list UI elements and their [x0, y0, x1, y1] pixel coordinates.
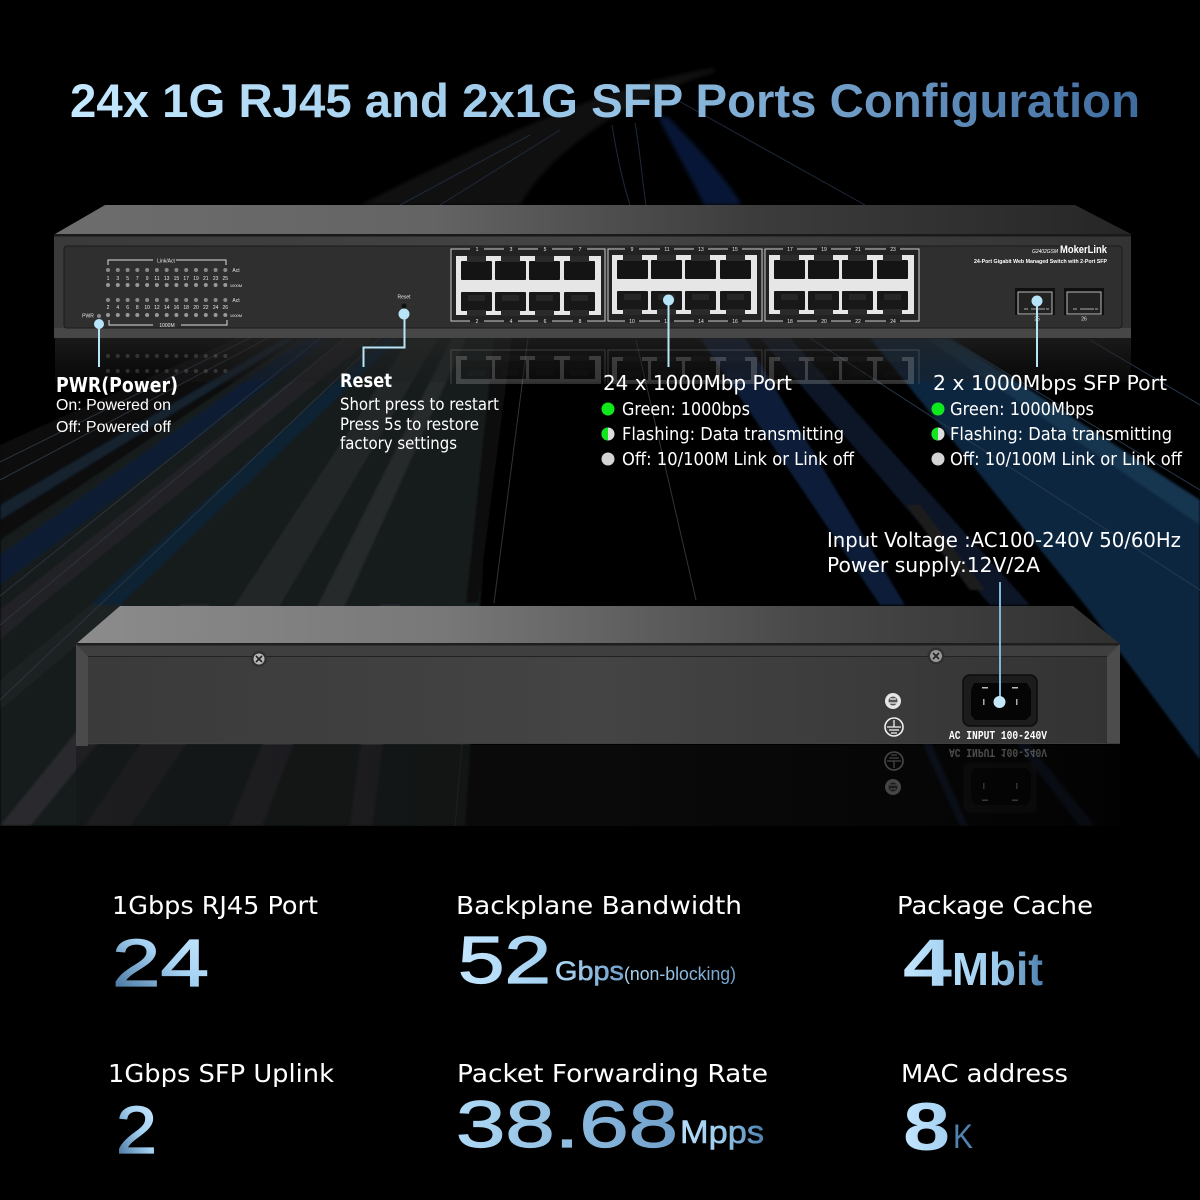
RJ45 port groups: 23	[890, 247, 896, 253]
spec: packet forwarding rate	[456, 1059, 768, 1161]
spec: backplane bandwidth	[456, 891, 742, 998]
RJ45 port groups: 17	[787, 247, 793, 253]
status LED block: 24	[213, 305, 219, 311]
reset button	[397, 294, 411, 308]
text block: SFP legend: Off: 10/100M Link or Link off	[950, 450, 1183, 470]
text block: power: On: Powered on	[56, 397, 171, 414]
spec: SFP uplink count: 1Gbps SFP Uplink	[108, 1059, 335, 1088]
status LED block: 5	[126, 276, 129, 282]
text block: power	[56, 373, 178, 436]
brand block: G2402GSM	[1032, 249, 1058, 255]
status LED block: 21	[203, 276, 209, 282]
status LED block: 18	[183, 305, 189, 311]
text block: power: PWR(Power)	[56, 373, 178, 397]
status LED block: Link/Act	[157, 258, 175, 264]
text block: RJ45 legend: Green: 1000bps	[622, 400, 750, 420]
status LED block	[82, 258, 242, 329]
status LED block: 23	[213, 276, 219, 282]
text block: reset: Press 5s to restore	[340, 415, 479, 434]
text block: power input	[827, 528, 1181, 577]
text block: RJ45 legend: Flashing: Data transmitting	[622, 425, 844, 445]
RJ45 port groups: 18	[787, 319, 793, 325]
spec: packet forwarding rate: Packet Forwarding Rate	[457, 1059, 768, 1088]
spec: RJ45 port count	[112, 891, 318, 1001]
status LED block: Act	[232, 268, 240, 274]
RJ45 port groups: 20	[821, 319, 827, 325]
status LED block: 13	[164, 276, 170, 282]
RJ45 port groups: 22	[855, 319, 861, 325]
callout line: power LED	[94, 319, 104, 367]
text block: reset: Short press to restart	[340, 395, 499, 414]
spec: backplane bandwidth: (non-blocking)	[624, 964, 736, 984]
rear switch reflection	[885, 745, 1047, 813]
screw right	[928, 648, 944, 664]
text block: SFP legend	[932, 371, 1183, 470]
rear body	[76, 644, 1120, 744]
text block: power input: Input Voltage :AC100-240V 50/60Hz	[827, 528, 1181, 552]
spec: backplane bandwidth: Backplane Bandwidth	[456, 891, 742, 920]
RJ45 port groups: 14	[698, 319, 704, 325]
title: 24x 1G RJ45 and 2x1G SFP Ports Configuration	[70, 74, 1140, 127]
status LED block: 15	[174, 276, 179, 282]
status LED block: 9	[146, 276, 149, 282]
brand block: MokerLink	[1060, 244, 1108, 256]
status LED block: 3	[116, 276, 119, 282]
RJ45 port groups: 13	[698, 247, 704, 253]
status LED block: 8	[136, 305, 139, 311]
callout line: reset	[364, 308, 410, 367]
spec: SFP uplink count	[108, 1059, 335, 1168]
status LED block: 1000M	[159, 323, 175, 329]
SFP ports: 25	[1034, 316, 1040, 322]
status LED block: 17	[183, 276, 189, 282]
RJ45 port groups: 9	[631, 247, 634, 253]
text block: reset: factory settings	[340, 434, 457, 453]
RJ45 port groups: 16	[732, 319, 738, 325]
RJ45 port groups: 19	[821, 247, 827, 253]
status LED block: 25	[223, 276, 228, 282]
status LED block: Act	[232, 298, 240, 304]
spec: MAC address: MAC address	[901, 1059, 1068, 1088]
rear switch reflection: AC INPUT 100-240V	[949, 745, 1047, 758]
callout line: power input	[994, 582, 1006, 708]
status LED block: 12	[154, 305, 160, 311]
RJ45 port groups: 6	[544, 319, 547, 325]
rear top face	[76, 606, 1120, 644]
spec: package cache	[897, 891, 1093, 1001]
status LED block: PWR	[82, 314, 94, 320]
callout line: RJ45 ports	[663, 294, 674, 367]
status LED block: 10	[144, 305, 150, 311]
icon: warning symbol	[885, 693, 901, 709]
callout line: SFP ports	[1032, 296, 1042, 367]
spec: MAC address	[901, 1059, 1068, 1165]
spec: package cache: Package Cache	[897, 891, 1093, 920]
spec: MAC address: 8	[903, 1089, 950, 1165]
status LED block: 1	[107, 276, 110, 282]
RJ45 port groups: 3	[510, 247, 513, 253]
RJ45 port groups: 7	[579, 247, 582, 253]
status LED block: 11	[154, 276, 160, 282]
RJ45 port groups: 12	[664, 319, 670, 325]
status LED block: 20	[193, 305, 199, 311]
text block: SFP legend: Flashing: Data transmitting	[950, 425, 1172, 445]
status LED block: 22	[203, 305, 209, 311]
spec: backplane bandwidth: Gbps	[555, 956, 624, 986]
front panel	[64, 246, 1122, 328]
text block: SFP legend: 2 x 1000Mbps SFP Port	[933, 371, 1167, 395]
switch front face	[54, 234, 1131, 338]
RJ45 port groups: 11	[664, 247, 670, 253]
RJ45 port groups: 2	[476, 319, 479, 325]
front view of switch	[54, 205, 1131, 338]
RJ45 port groups: 5	[544, 247, 547, 253]
text block: power input: Power supply:12V/2A	[827, 553, 1040, 577]
rear view of switch	[76, 606, 1120, 746]
status LED block: 14	[164, 305, 170, 311]
bottom black band	[0, 826, 1200, 1200]
RJ45 port groups: 8	[579, 319, 582, 325]
status LED block: 6	[126, 305, 129, 311]
RJ45 port groups: 24	[890, 319, 896, 325]
icon: ground symbol	[885, 718, 903, 736]
switch top face	[55, 205, 1131, 234]
RJ45 port groups: 1	[476, 247, 479, 253]
RJ45 port groups: 10	[629, 319, 635, 325]
spec: SFP uplink count: 2	[116, 1093, 157, 1168]
spec: MAC address: K	[953, 1118, 973, 1156]
screw left	[251, 651, 267, 667]
spec: packet forwarding rate: 38.68	[456, 1087, 678, 1161]
text block: reset	[340, 370, 499, 453]
spec: RJ45 port count: 1Gbps RJ45 Port	[112, 891, 318, 920]
status LED block: 7	[136, 276, 139, 282]
background: highway light trails	[0, 0, 1200, 826]
text block: power: Off: Powered off	[56, 419, 172, 436]
spec: RJ45 port count: 24	[112, 926, 209, 1001]
brand block	[974, 244, 1108, 265]
brand block: 24-Port Gigabit Web Managed Switch with 2-Port SFP	[974, 259, 1107, 265]
status LED block: 26	[223, 305, 228, 311]
SFP ports: 26	[1081, 316, 1087, 322]
status LED block: 1000M	[230, 283, 242, 288]
AC input label: AC INPUT 100-240V	[949, 730, 1047, 743]
text block: reset: Reset	[340, 370, 392, 392]
status LED block: 19	[193, 276, 199, 282]
text block: RJ45 legend	[602, 371, 855, 470]
status LED block: 4	[116, 305, 119, 311]
front switch reflection	[106, 350, 1024, 384]
text block: SFP legend: Green: 1000Mbps	[950, 400, 1094, 420]
RJ45 port groups: 21	[855, 247, 861, 253]
spec: packet forwarding rate: Mpps	[680, 1114, 764, 1150]
RJ45 port groups: 15	[732, 247, 738, 253]
RJ45 port groups	[451, 247, 919, 325]
status LED block: 16	[174, 305, 179, 311]
text block: RJ45 legend: Off: 10/100M Link or Link off	[622, 450, 855, 470]
AC power socket	[963, 675, 1037, 726]
status LED block: 1000M	[230, 313, 242, 318]
SFP ports	[1015, 288, 1104, 322]
RJ45 port groups: 4	[510, 319, 513, 325]
spec: package cache: 4	[903, 926, 952, 1001]
status LED block: 2	[107, 305, 110, 311]
text block: RJ45 legend: 24 x 1000Mbp Port	[603, 371, 792, 395]
spec: backplane bandwidth: 52	[458, 923, 551, 998]
spec: package cache: Mbit	[952, 943, 1043, 995]
reset button: Reset	[397, 294, 411, 300]
rear side flanges	[76, 644, 1120, 746]
